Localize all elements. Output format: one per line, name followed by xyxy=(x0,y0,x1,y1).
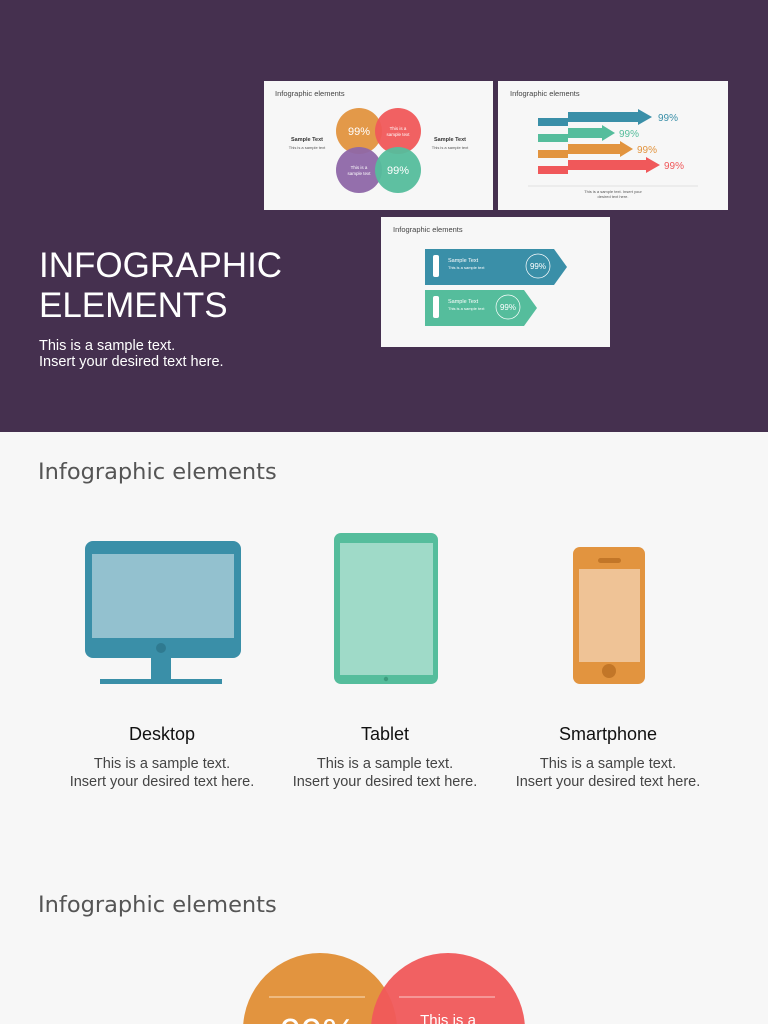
thumbnail: banners slide: Sample Text xyxy=(448,299,479,305)
caption: smartphone xyxy=(516,724,700,790)
caption: tablet: This is a sample text. xyxy=(317,756,453,772)
heading: section 2: Infographic elements xyxy=(38,892,277,918)
caption: desktop xyxy=(70,724,254,790)
subtitle: Insert your desired text here. xyxy=(39,354,224,370)
subtitle: This is a sample text. xyxy=(39,338,175,354)
title xyxy=(39,246,282,325)
thumbnail: banners slide: Sample Text xyxy=(448,258,479,264)
thumbnail: arrows slide: Infographic elements xyxy=(510,89,580,98)
thumbnail: banners slide: This is a sample text xyxy=(448,306,485,311)
thumbnail: banners slide: 99% xyxy=(530,262,546,271)
thumbnail: circles slide: sample text xyxy=(347,171,371,176)
caption: tablet: Insert your desired text here. xyxy=(293,774,477,790)
thumbnail: circles slide: This is a sample text xyxy=(432,145,469,150)
thumbnail: banners slide xyxy=(381,217,610,347)
thumbnail: arrows slide xyxy=(498,81,728,210)
thumbnail: arrows slide: This is a sample text. Insert your xyxy=(584,189,642,194)
subtitle xyxy=(39,338,224,370)
header panel xyxy=(0,0,768,432)
caption: smartphone: Insert your desired text here. xyxy=(516,774,700,790)
thumbnail: banners slide: Infographic elements xyxy=(393,225,463,234)
icon: tablet xyxy=(334,533,438,684)
caption: desktop: This is a sample text. xyxy=(94,756,230,772)
heading: section 1: Infographic elements xyxy=(38,459,277,485)
title: ELEMENTS xyxy=(39,286,228,325)
thumbnail: banners slide: 99% xyxy=(500,303,516,312)
thumbnail: circles slide: sample text xyxy=(386,132,410,137)
thumbnail: circles slide: 99% xyxy=(348,126,370,138)
thumbnail: circles slide: Sample Text xyxy=(291,137,323,143)
thumbnail: circles slide: Sample Text xyxy=(434,137,466,143)
caption: smartphone: Smartphone xyxy=(559,724,657,744)
caption: desktop: Desktop xyxy=(129,724,195,744)
icon: smartphone xyxy=(573,547,645,684)
thumbnail: circles slide xyxy=(264,81,493,210)
caption: desktop: Insert your desired text here. xyxy=(70,774,254,790)
caption: tablet xyxy=(293,724,477,790)
thumbnail: banners slide: This is a sample text xyxy=(448,265,485,270)
thumbnail: circles slide: This is a xyxy=(390,126,407,131)
caption: tablet: Tablet xyxy=(361,724,409,744)
thumbnail: arrows slide: 99% xyxy=(637,145,657,156)
icon: desktop xyxy=(85,541,241,684)
thumbnail: circles slide: Infographic elements xyxy=(275,89,345,98)
thumbnail: arrows slide: 99% xyxy=(619,129,639,140)
thumbnail: arrows slide: desired text here. xyxy=(598,194,628,199)
thumbnail: circles slide: This is a sample text xyxy=(289,145,326,150)
thumbnail: arrows slide: 99% xyxy=(664,161,684,172)
title: INFOGRAPHIC xyxy=(39,246,282,285)
thumbnail: circles slide: 99% xyxy=(387,165,409,177)
caption: smartphone: This is a sample text. xyxy=(540,756,676,772)
venn circles xyxy=(243,953,525,1024)
thumbnail: circles slide: This is a xyxy=(351,165,368,170)
thumbnail: arrows slide: 99% xyxy=(658,113,678,124)
